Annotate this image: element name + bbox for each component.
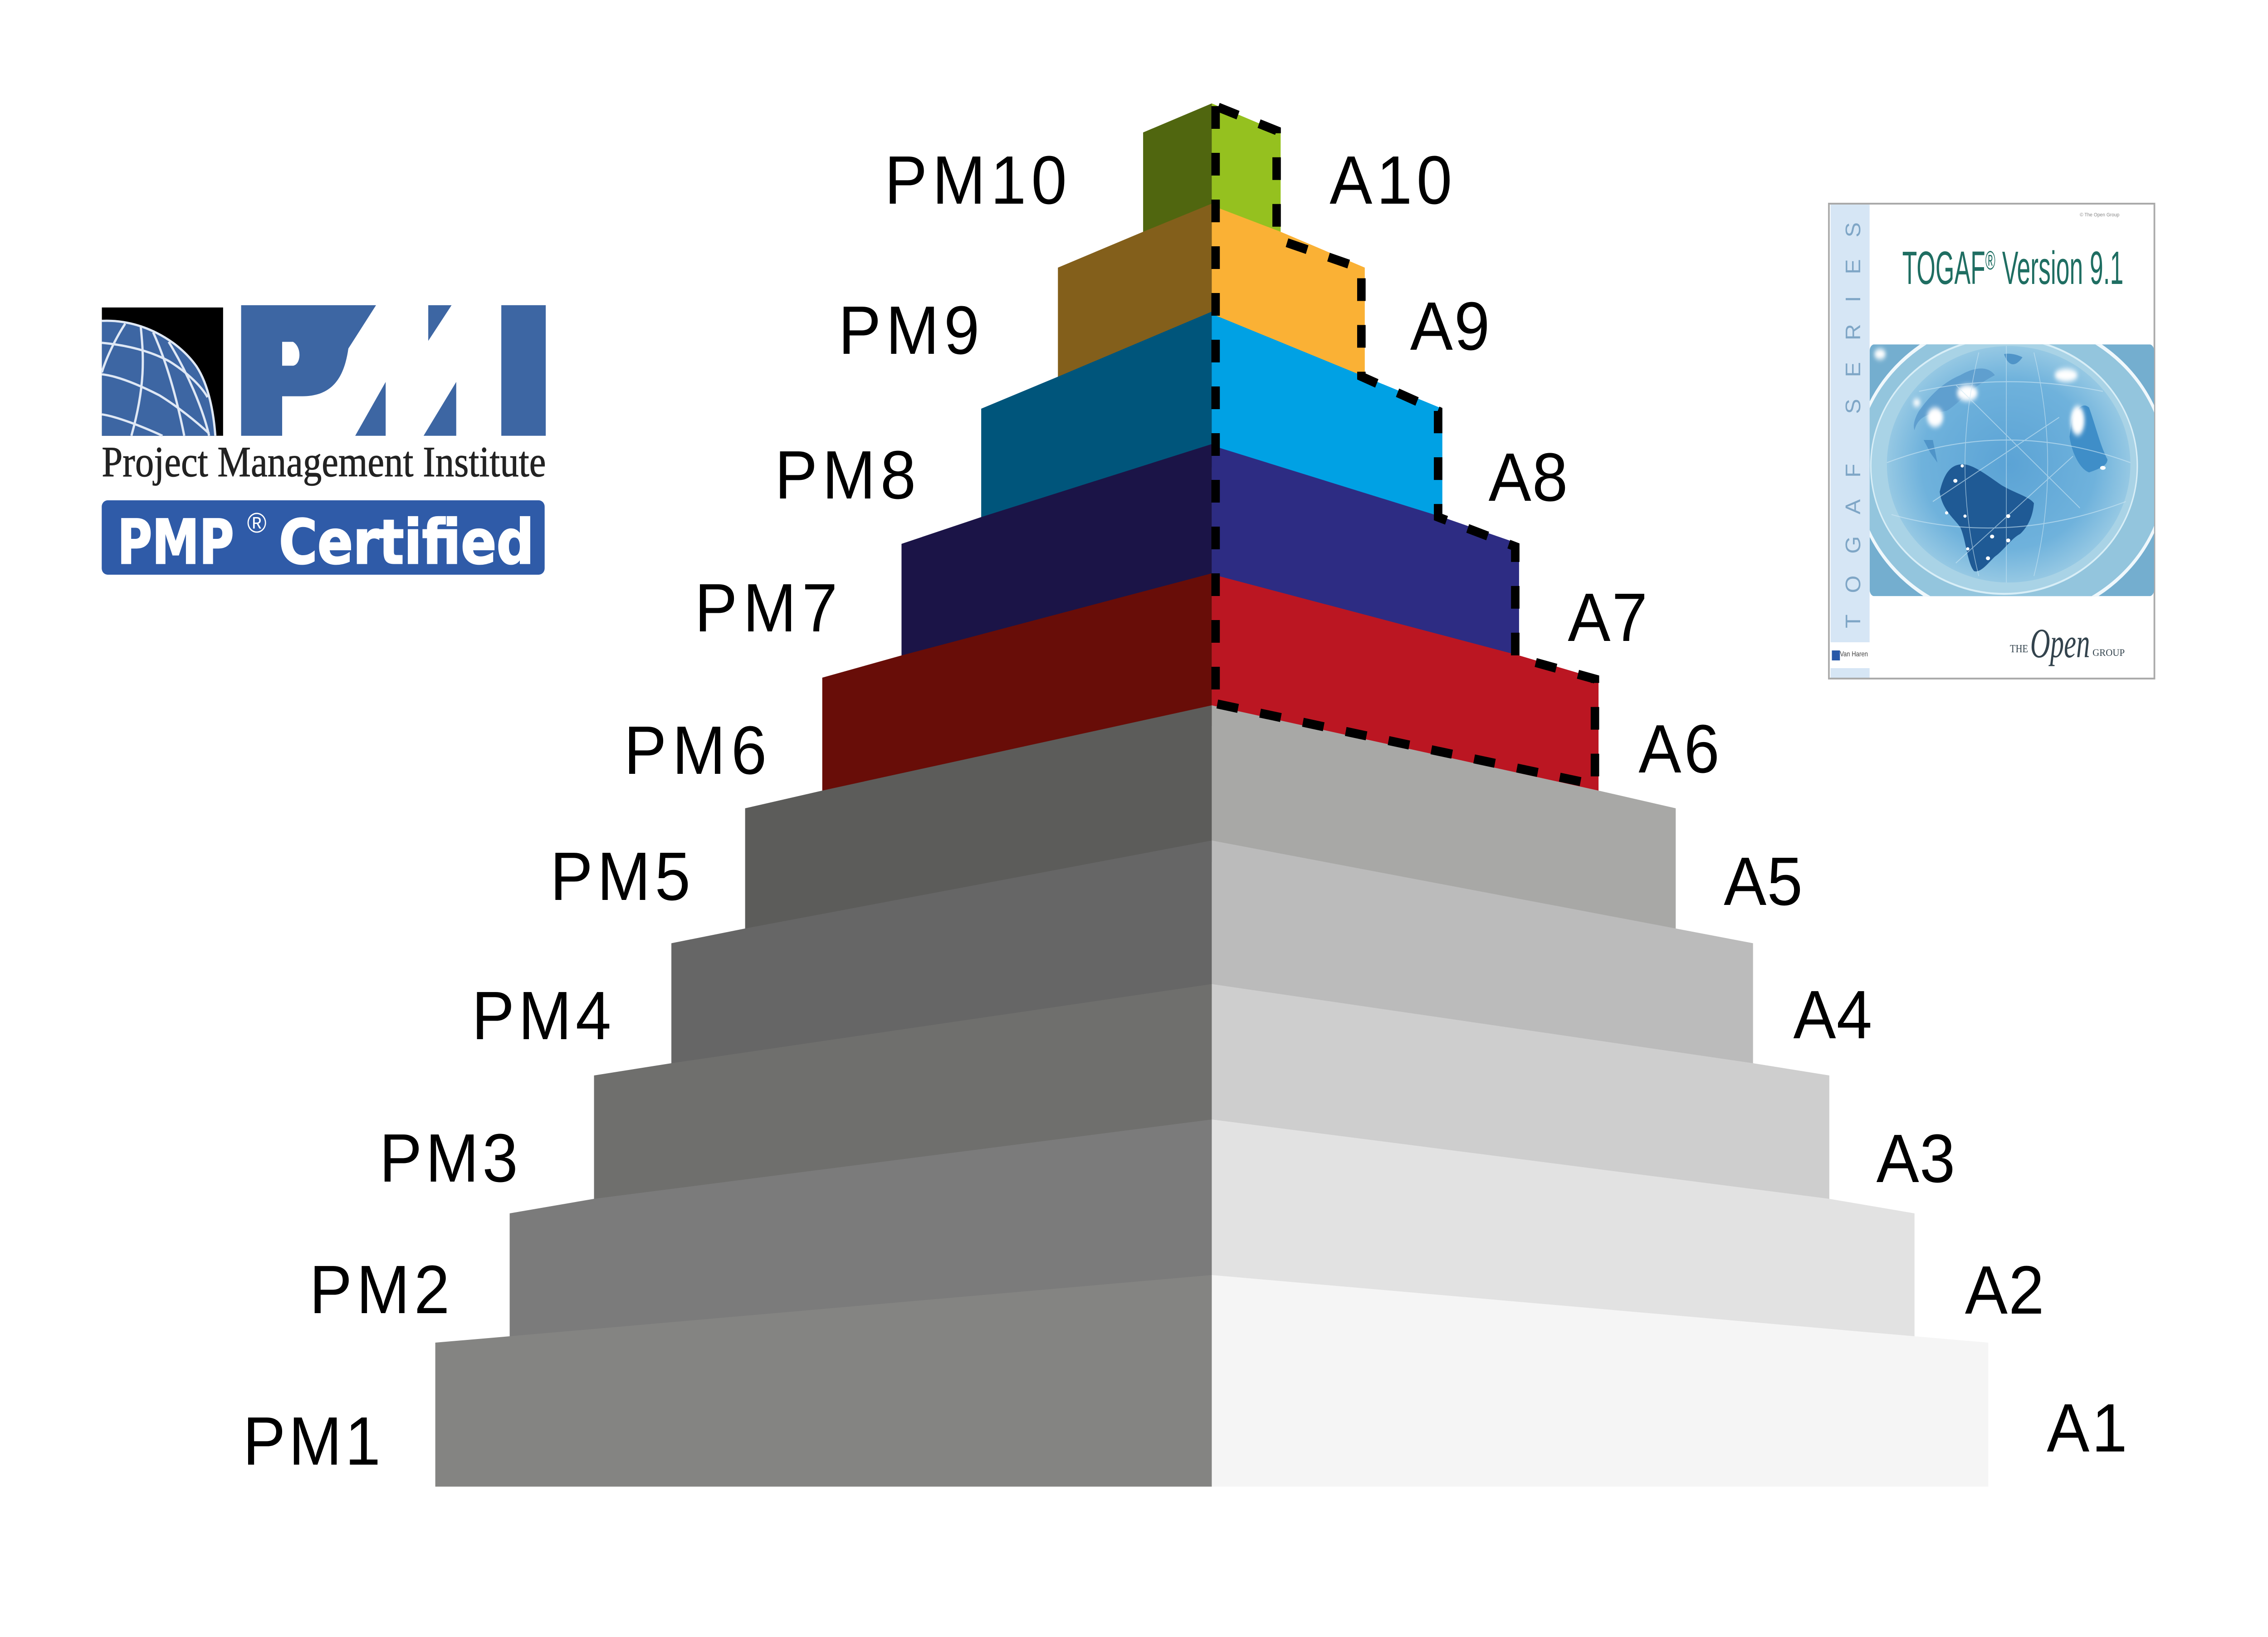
badge: PMP Certified [102, 500, 545, 578]
tier: A3 right face [1212, 984, 1829, 1216]
The Open Group logo: Open [2030, 621, 2090, 667]
globe image [1870, 344, 2154, 596]
label A3: A3 [1877, 1120, 1955, 1197]
tier: PM7 left face [901, 444, 1212, 671]
label PM5: PM5 [550, 838, 690, 914]
label PM3: PM3 [379, 1120, 518, 1196]
label A7: A7 [1568, 579, 1647, 655]
label PM6: PM6 [624, 712, 767, 788]
PMI logo [102, 305, 546, 578]
label PM1: PM1 [243, 1403, 381, 1479]
South America [1940, 464, 2034, 572]
logo letters PMI [241, 305, 546, 436]
book spine band [1831, 205, 1870, 642]
label PM2: PM2 [309, 1251, 450, 1328]
tier: PM6 left face [822, 573, 1212, 803]
van Haren logo: Van Haren [1840, 650, 1868, 658]
tier: PM1 left face [435, 1275, 1212, 1487]
The Open Group logo: THE [2010, 643, 2028, 655]
label A10: A10 [1330, 142, 1452, 218]
label PM4: PM4 [472, 977, 611, 1054]
van Haren logo [1832, 650, 1868, 660]
tier: PM5 left face [745, 705, 1212, 943]
icon: PMI globe [102, 308, 223, 436]
tier: A10 right face [1212, 103, 1281, 254]
label PM8: PM8 [775, 437, 916, 513]
tier: A2 right face [1212, 1119, 1915, 1349]
right labels: architect levels [1330, 142, 2127, 1466]
label A5: A5 [1724, 843, 1803, 919]
tier: PM8 left face [981, 312, 1212, 531]
tier: A9 right face [1212, 205, 1365, 390]
label PM10: PM10 [885, 142, 1067, 218]
tier: PM9 left face [1058, 204, 1212, 390]
tiny publisher note: © The Open Group [2080, 212, 2119, 218]
label A8: A8 [1489, 439, 1568, 515]
dashed outline around architect tiers A6 to A10 [1216, 106, 1595, 785]
book title: TOGAF [1902, 242, 2052, 294]
tier: A7 right face [1212, 445, 1519, 671]
tier: PM4 left face [671, 840, 1212, 1075]
pyramid chart [435, 103, 1988, 1487]
badge: PMP Certified: ® [247, 507, 266, 538]
tier: PM3 left face [594, 984, 1212, 1216]
left labels: PM levels [243, 142, 1067, 1479]
tier: PM10 left face [1143, 103, 1212, 254]
highlights [1874, 349, 2084, 435]
badge: PMP Certified: Certified [279, 507, 534, 578]
label A4: A4 [1793, 977, 1872, 1053]
book title: Version 9.1 [1995, 242, 2123, 294]
book title: ® [1985, 245, 1995, 275]
label PM7: PM7 [694, 570, 837, 646]
tier: A6 right face [1212, 574, 1598, 803]
badge: PMP Certified: PMP [117, 507, 234, 578]
label A1: A1 [2047, 1390, 2127, 1466]
book page [1829, 204, 2155, 679]
text: Project Management Institute: Project Management Institute [102, 438, 546, 486]
tier: A4 right face [1212, 840, 1753, 1075]
label A2: A2 [1965, 1252, 2044, 1328]
tier: PM2 left face [510, 1119, 1212, 1349]
TOGAF book cover [1829, 204, 2167, 679]
label A6: A6 [1638, 711, 1720, 787]
label A9: A9 [1410, 288, 1490, 364]
North America [1914, 368, 1995, 430]
tier: A1 right face [1212, 1275, 1988, 1487]
tier: A8 right face [1212, 314, 1442, 531]
city dots [1945, 464, 2106, 560]
grid lines [1887, 346, 2131, 582]
tier: A5 right face [1212, 705, 1676, 943]
Africa [2069, 406, 2107, 472]
The Open Group logo: GROUP [2092, 647, 2125, 658]
spine text: TOGAF SERIES: TOGAF SERIES [1842, 222, 1865, 628]
label PM9: PM9 [838, 292, 979, 368]
